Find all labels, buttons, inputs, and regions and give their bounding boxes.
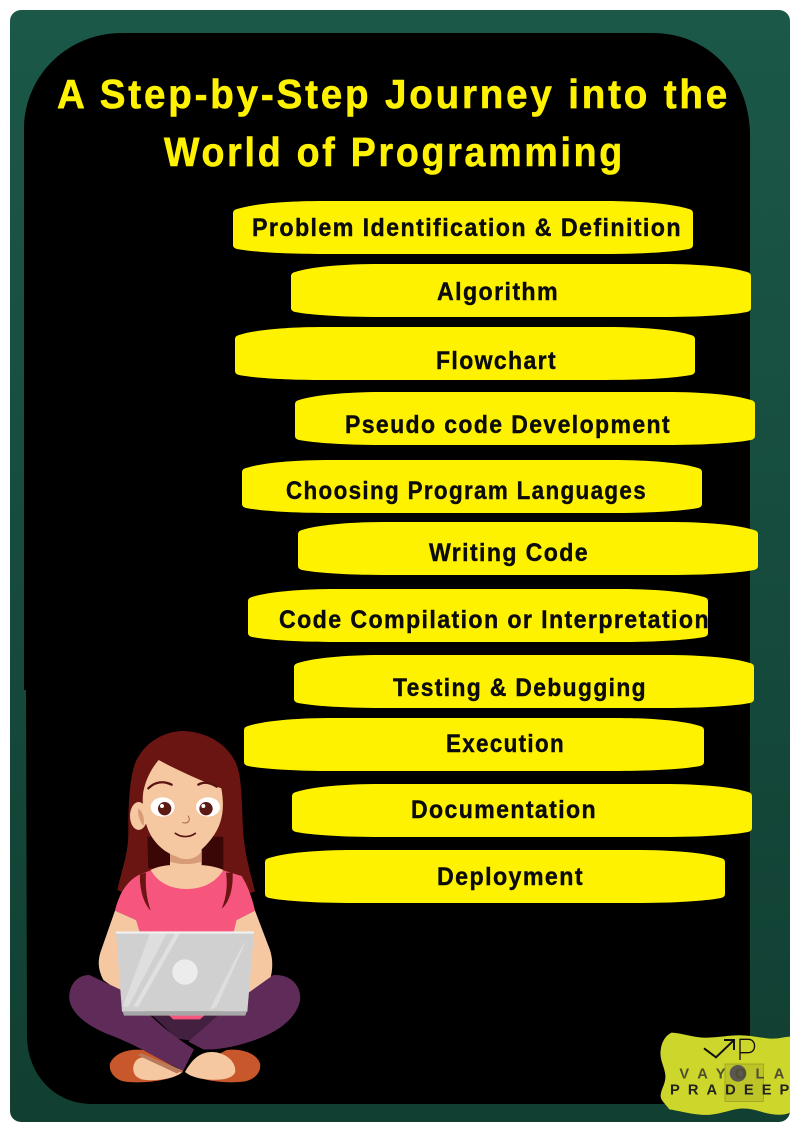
step 11: Deployment: [265, 850, 725, 903]
left eyebrow: [148, 782, 172, 788]
step 3: Flowchart: [235, 327, 695, 380]
shirt: [115, 869, 255, 935]
left arm: [99, 911, 140, 997]
logo VAYOLA: VAYOLA: [679, 1067, 785, 1083]
right leg: [188, 975, 300, 1050]
step 6: Writing Code: Writing Code: [429, 539, 589, 567]
step 3: Flowchart: Flowchart: [436, 347, 557, 375]
neck shadow: [170, 852, 202, 864]
step 10: Documentation: [292, 784, 752, 837]
step 5: Choosing Program Languages: Choosing Program Languages: [286, 477, 647, 505]
left leg: [69, 975, 194, 1071]
title: [57, 71, 730, 175]
step 8: Testing & Debugging: Testing & Debugging: [393, 674, 647, 702]
logo badge circle: [730, 1065, 746, 1082]
step 1: Problem Identification & Definition: Problem Identification & Definition: [252, 214, 682, 242]
step 5: Choosing Program Languages: [242, 460, 702, 513]
logo badge: [660, 1033, 790, 1115]
step 6: Writing Code: [298, 522, 758, 575]
title: A Step-by-Step Journey into the: [57, 71, 730, 117]
laptop: [116, 931, 254, 1016]
ear: [130, 802, 147, 830]
step 4: Pseudo code Development: [295, 392, 755, 445]
nose: [183, 816, 189, 823]
right shoe: [185, 1050, 260, 1082]
illustration: girl with laptop: [69, 731, 300, 1082]
shin shadow: [137, 1053, 183, 1073]
step 7: Code Compilation or Interpretation: [248, 589, 710, 642]
right foot: [185, 1052, 235, 1080]
step 2: Algorithm: Algorithm: [437, 278, 559, 306]
step 10: Documentation: Documentation: [411, 796, 597, 824]
step 7: Code Compilation or Interpretation: Code Compilation or Interpretation: [279, 606, 710, 634]
neck: [170, 847, 202, 868]
hair shadow behind neck: [147, 837, 223, 870]
left shoe: [110, 1050, 183, 1082]
hair back: [117, 731, 255, 900]
right eye: [196, 797, 220, 817]
chest: [151, 865, 223, 889]
logo dotted patch: [725, 1064, 763, 1101]
hair strands: [140, 873, 151, 911]
left eye: [151, 797, 175, 817]
step 9: Execution: Execution: [446, 730, 565, 758]
smile: [175, 833, 195, 837]
step 1: Problem Identification & Definition: [233, 201, 693, 254]
step 4: Pseudo code Development: Pseudo code Development: [345, 411, 671, 439]
inner pants: [150, 1013, 220, 1042]
left foot: [133, 1058, 182, 1080]
step 9: Execution: [244, 718, 704, 771]
logo P mark: [740, 1039, 755, 1060]
step 11: Deployment: Deployment: [437, 863, 584, 891]
title: World of Programming: [164, 129, 625, 175]
logo check arrow mark: [704, 1040, 734, 1057]
logo: Vayola Pradeep: [660, 1033, 790, 1115]
logo PRADEEP: PRADEEP: [670, 1083, 790, 1099]
right arm: [233, 911, 272, 997]
step 8: Testing & Debugging: [294, 655, 754, 708]
waist: [167, 1013, 207, 1019]
right eyebrow: [198, 783, 217, 787]
face: [143, 760, 223, 857]
step 2: Algorithm: [291, 264, 751, 317]
ear shadow: [138, 808, 144, 826]
